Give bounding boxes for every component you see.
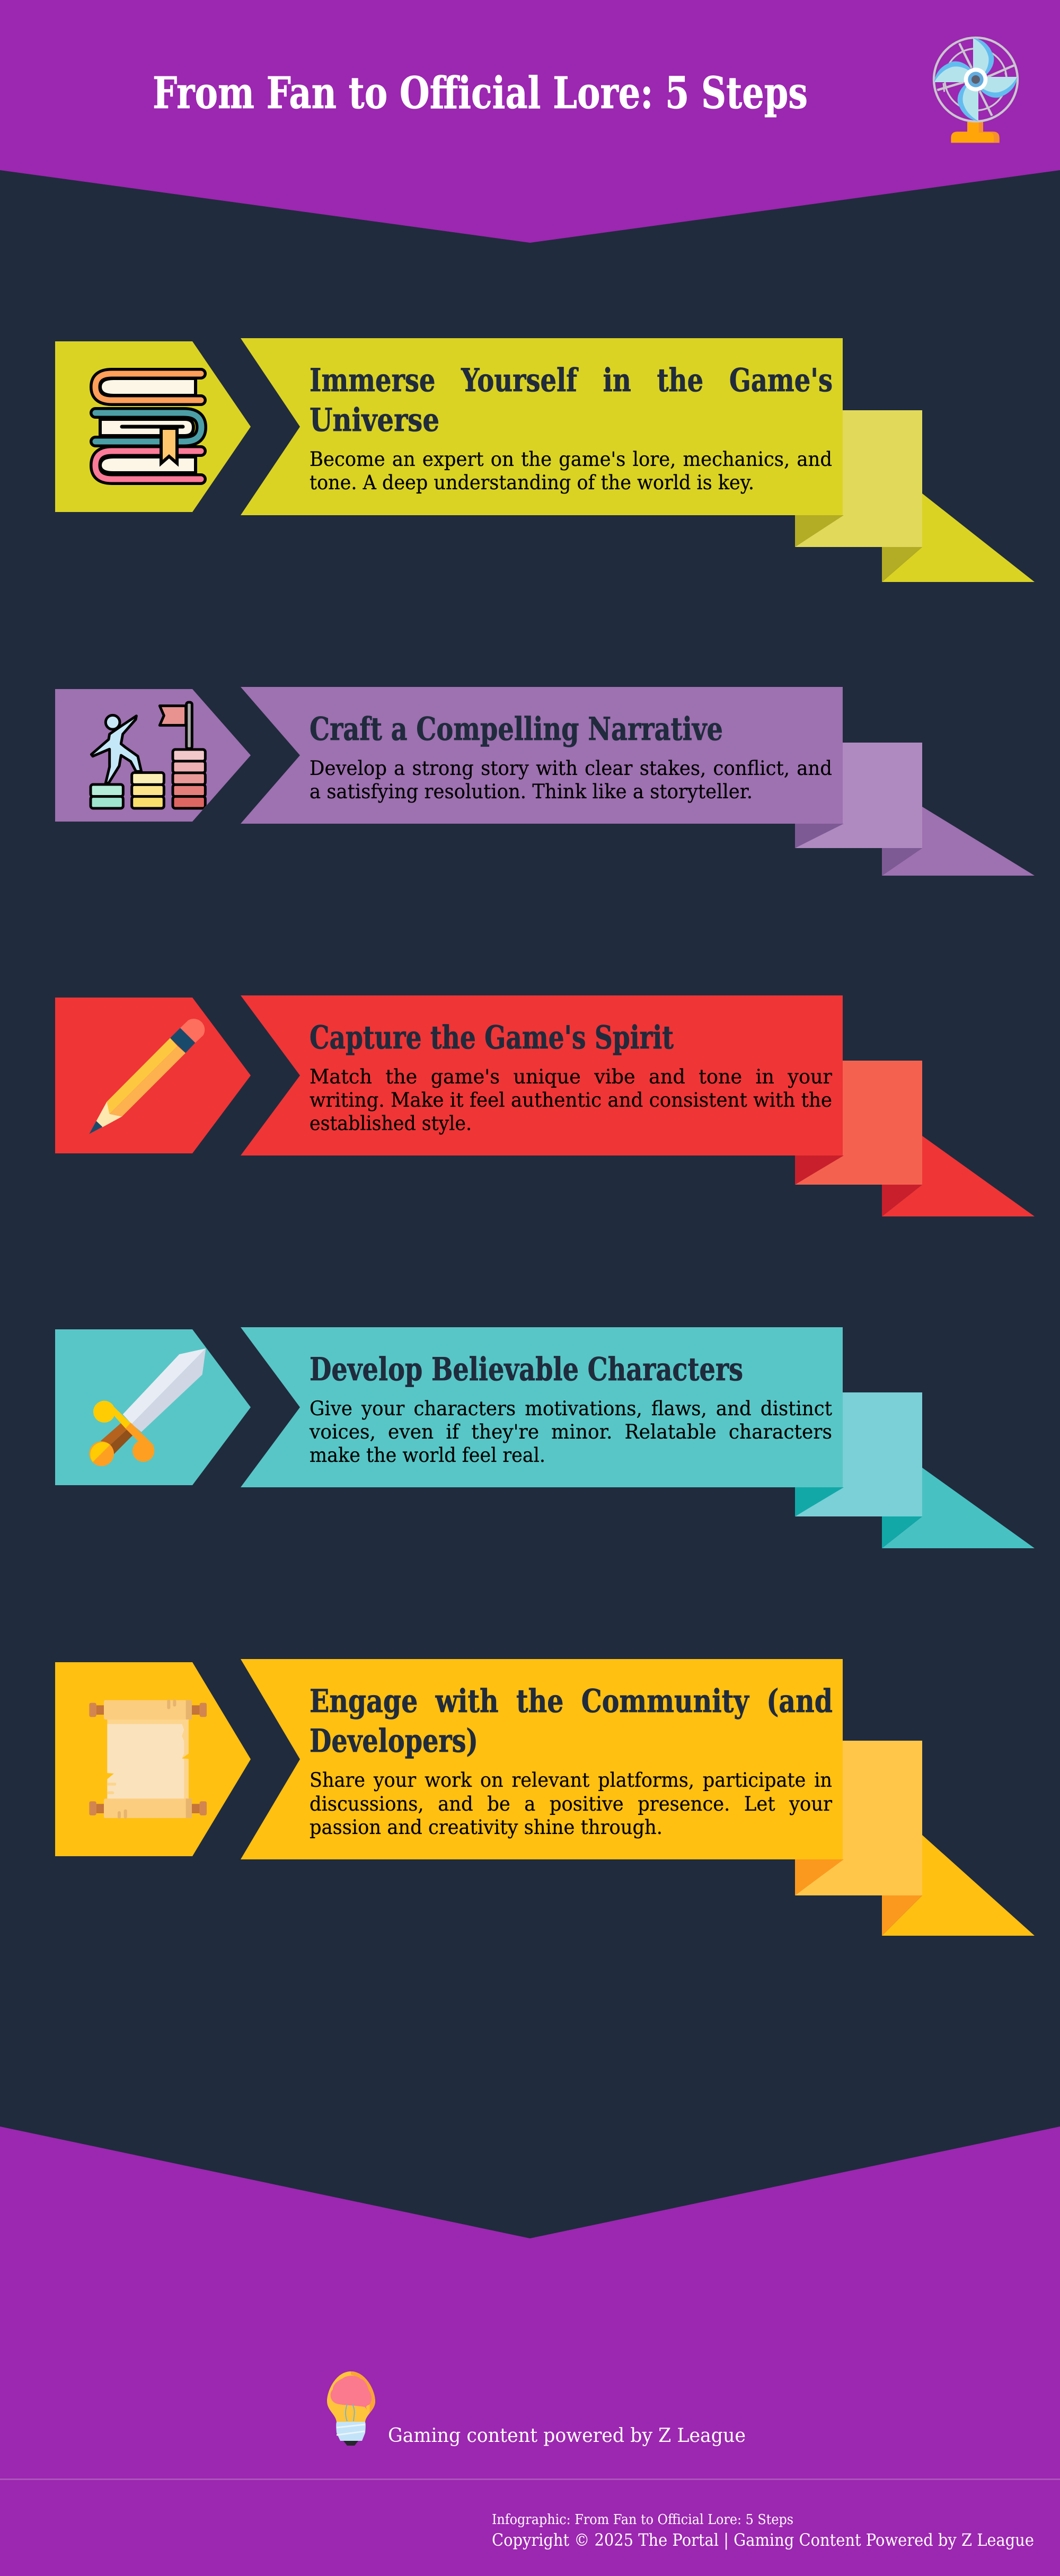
text: step 4: make the world feel real. xyxy=(310,1444,545,1467)
text: step 3: writing. Make it feel authentic and consistent with the xyxy=(310,1089,832,1111)
text: step 1: tone. A deep understanding of the world is key. xyxy=(310,471,754,494)
icon: sword xyxy=(89,1348,206,1466)
icon: parchment scroll xyxy=(89,1700,207,1818)
footer band xyxy=(0,2127,1060,2576)
ribbon fold: step 3 xyxy=(795,1061,1035,1216)
heading: step 5: Developers) xyxy=(310,1723,478,1760)
icon panel: step 3 xyxy=(55,998,251,1153)
panel: step 5 xyxy=(55,1659,1035,1936)
text: step 3: established style. xyxy=(310,1112,472,1135)
icon: desk fan xyxy=(934,38,1018,143)
icon: climbing steps to flag xyxy=(91,702,205,808)
icon: pencil xyxy=(89,1019,205,1134)
ribbon fold: step 2 xyxy=(795,743,1035,876)
panel: step 4 xyxy=(55,1327,1035,1548)
footer divider xyxy=(0,2478,1060,2480)
text: step 4 xyxy=(309,1397,832,1467)
text: step 4: voices, even if they're minor. Relatable characters xyxy=(309,1421,832,1443)
banner: step 5 xyxy=(241,1659,843,1859)
panel: step 3 xyxy=(55,995,1035,1216)
text: step 1: Become an expert on the game's lore, mechanics, and xyxy=(310,448,832,471)
icon panel: step 4 xyxy=(55,1329,251,1485)
banner: step 1 xyxy=(241,338,843,515)
banner: step 3 xyxy=(241,995,843,1155)
banner: step 4 xyxy=(241,1327,843,1487)
heading: step 2: Craft a Compelling Narrative xyxy=(310,711,723,748)
text: step 3 xyxy=(310,1065,832,1135)
title: From Fan to Official Lore: 5 Steps xyxy=(153,68,808,119)
text: step 5 xyxy=(310,1769,832,1839)
ribbon fold: step 4 xyxy=(795,1392,1035,1548)
text: step 5: discussions, and be a positive presence. Let your xyxy=(310,1793,832,1815)
text: step 5: Share your work on relevant platforms, participate in xyxy=(310,1769,832,1792)
footer credit line: Infographic: From Fan to Official Lore: 5 Steps xyxy=(492,2512,793,2528)
icon panel: step 5 xyxy=(55,1662,251,1856)
heading: step 5 xyxy=(310,1683,833,1760)
ribbon fold: step 1 xyxy=(795,410,1035,582)
text: step 4: Give your characters motivations, flaws, and distinct xyxy=(310,1397,832,1420)
text: step 2 xyxy=(310,757,832,803)
icon: stack of books xyxy=(95,374,201,479)
heading: step 4: Develop Believable Characters xyxy=(310,1351,743,1388)
text: step 2: Develop a strong story with clear stakes, conflict, and xyxy=(310,757,832,780)
ribbon fold: step 5 xyxy=(795,1741,1035,1936)
heading: step 1 xyxy=(310,362,833,439)
heading: step 1: Universe xyxy=(310,402,439,439)
text: step 2: a satisfying resolution. Think like a storyteller. xyxy=(310,780,753,803)
text: step 5: passion and creativity shine through. xyxy=(310,1816,662,1839)
heading: step 3: Capture the Game's Spirit xyxy=(310,1019,674,1056)
panel: step 2 xyxy=(55,687,1035,876)
text: step 3: Match the game's unique vibe and tone in your xyxy=(310,1065,832,1088)
header banner xyxy=(0,0,1060,243)
icon: light bulb with brain xyxy=(327,2371,375,2446)
icon panel: step 1 xyxy=(55,341,251,512)
heading: step 1: Immerse Yourself in the Game's xyxy=(310,362,833,399)
heading: step 5: Engage with the Community (and xyxy=(310,1683,833,1720)
text: step 1 xyxy=(310,448,832,494)
footer tagline: Gaming content powered by Z League xyxy=(388,2425,746,2447)
icon panel: step 2 xyxy=(55,689,251,822)
banner: step 2 xyxy=(241,687,843,824)
panel: step 1 xyxy=(55,338,1035,582)
